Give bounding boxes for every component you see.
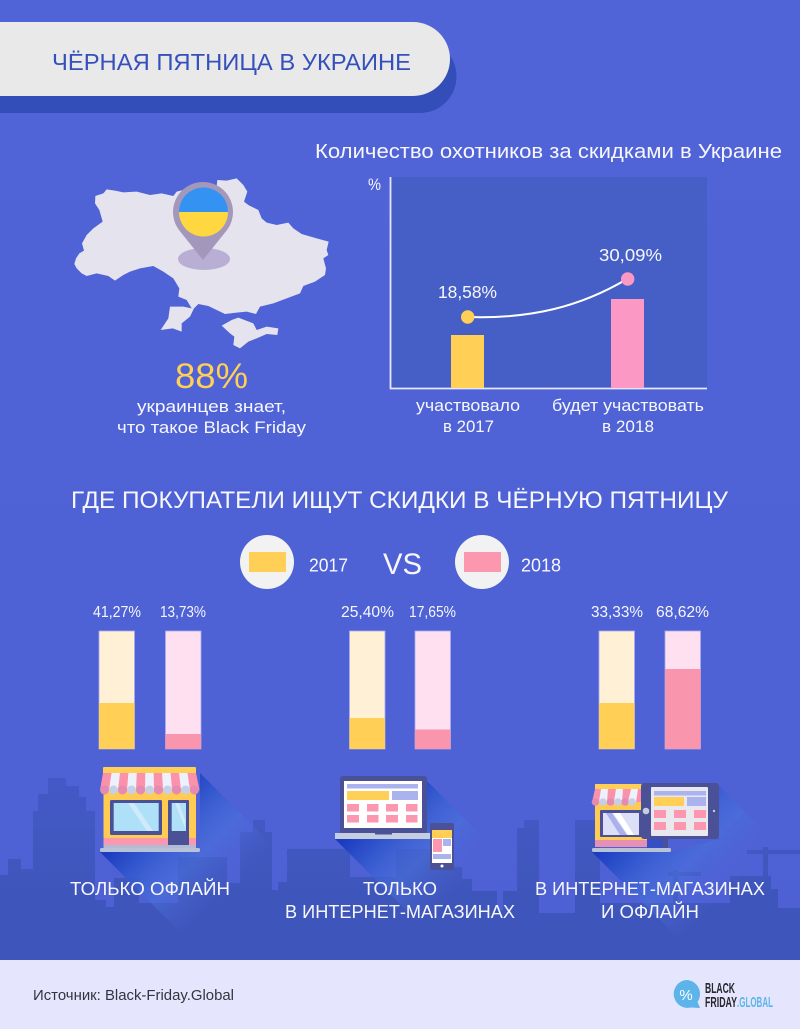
- bar 2017: [451, 335, 484, 388]
- chart: online and offline: [591, 604, 709, 749]
- city skyline background: [0, 778, 800, 960]
- source: Источник: Black-Friday.Global: [33, 988, 234, 1004]
- label: online only: [285, 879, 515, 922]
- bar 2018: [611, 299, 644, 388]
- logo: BLACK: [705, 980, 735, 997]
- label: online and offline: В ИНТЕРНЕТ-МАГАЗИНАХ: [535, 879, 765, 899]
- bar chart: hunters for discounts: %: [368, 176, 381, 194]
- stat description: что такое Black Friday: [117, 418, 307, 437]
- legend: 2017: [309, 556, 348, 576]
- icon: laptop and phone: [335, 776, 530, 934]
- icon: shop: [100, 767, 300, 943]
- header banner: [0, 22, 456, 113]
- axis labels: будет участвовать: [552, 396, 704, 415]
- label: offline only: ТОЛЬКО ОФЛАЙН: [70, 878, 230, 899]
- logo: [674, 980, 773, 1011]
- logo: FRIDAY: [705, 994, 737, 1011]
- axis labels: участвовало: [416, 396, 520, 415]
- stat description: [117, 397, 307, 437]
- icon: location pin with flag: [173, 182, 233, 270]
- bar chart: hunters for discounts: [368, 176, 707, 436]
- legend: [240, 535, 561, 589]
- legend: VS: [383, 548, 422, 581]
- stat: 88%: 88%: [175, 357, 248, 396]
- title: ЧЁРНАЯ ПЯТНИЦА В УКРАИНЕ: [52, 49, 411, 75]
- icon: shop and tablet: [592, 783, 800, 947]
- value 2017: 18,58%: [438, 282, 497, 302]
- chart: offline only: 13,73%: [160, 604, 206, 621]
- chart: offline only: [93, 604, 206, 749]
- stat description: украинцев знает,: [137, 397, 286, 416]
- label: online only: В ИНТЕРНЕТ-МАГАЗИНАХ: [285, 902, 515, 922]
- section heading: ГДЕ ПОКУПАТЕЛИ ИЩУТ СКИДКИ В ЧЁРНУЮ ПЯТНИЦУ: [71, 487, 729, 514]
- logo: %: [679, 987, 693, 1004]
- chart: online and offline: 33,33%: [591, 604, 643, 621]
- chart: online only: [341, 604, 456, 749]
- chart: online and offline: 68,62%: [656, 604, 709, 621]
- point 2018: [621, 272, 634, 286]
- chart: online only: 17,65%: [409, 604, 456, 621]
- legend: 2018: [521, 556, 561, 576]
- axis labels: в 2017: [443, 417, 494, 436]
- panel: awareness map: [74, 178, 329, 437]
- label: online and offline: [535, 879, 765, 922]
- value 2018: 30,09%: [599, 245, 662, 265]
- chart: offline only: 41,27%: [93, 604, 141, 621]
- trend curve: [468, 279, 627, 317]
- label: online only: ТОЛЬКО: [363, 879, 437, 899]
- point 2017: [461, 310, 474, 324]
- axis labels: [416, 396, 704, 436]
- chart: online only: 25,40%: [341, 604, 394, 621]
- label: online and offline: И ОФЛАЙН: [601, 901, 699, 922]
- chart heading: Количество охотников за скидками в Украине: [315, 141, 782, 163]
- footer: [0, 960, 800, 1029]
- axis labels: в 2018: [602, 417, 654, 436]
- map of Ukraine: [74, 178, 329, 348]
